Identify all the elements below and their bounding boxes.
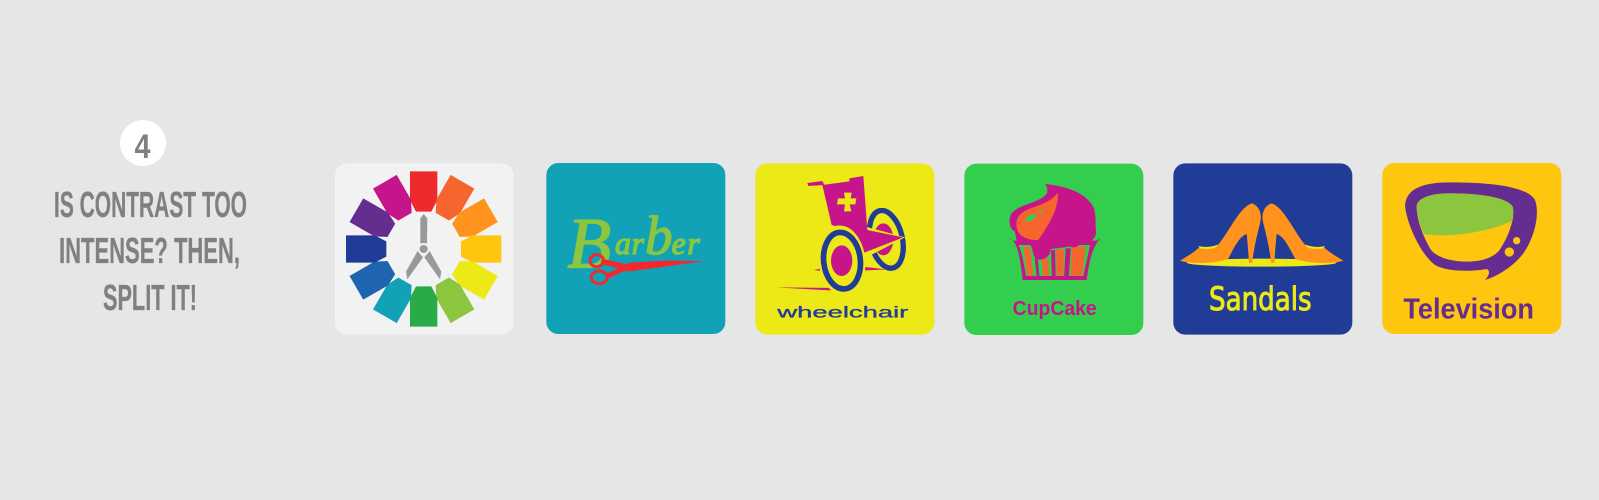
logo wordmark: r bbox=[687, 226, 700, 261]
panel: cupcake logo bbox=[964, 164, 1143, 335]
panel: split-complementary colour wheel bbox=[335, 163, 514, 335]
logo wordmark: wheelchair bbox=[776, 305, 909, 322]
logo wordmark: Sandals bbox=[1209, 280, 1312, 318]
panel: sandals logo bbox=[1173, 163, 1352, 335]
heading text: SPLIT IT! bbox=[103, 277, 197, 318]
step number badge bbox=[120, 120, 166, 166]
icon: television bbox=[1405, 182, 1537, 280]
step heading block bbox=[54, 120, 247, 318]
icon: scissors bbox=[590, 255, 704, 284]
icon: wheelchair bbox=[776, 176, 909, 298]
heading text: INTENSE? THEN, bbox=[59, 230, 240, 271]
panel: wheelchair logo bbox=[755, 163, 934, 335]
icon: cupcake bbox=[1008, 184, 1101, 280]
icon: high heels bbox=[1180, 203, 1343, 267]
logo wordmark: e bbox=[672, 226, 686, 261]
logo wordmark: CupCake bbox=[1013, 297, 1097, 320]
heading text: IS CONTRAST TOO bbox=[54, 184, 247, 225]
icon: colour wheel tags bbox=[346, 171, 501, 327]
step number badge: 4 bbox=[134, 128, 151, 166]
panel: television logo bbox=[1382, 163, 1561, 334]
logo wordmark: Television bbox=[1403, 293, 1534, 325]
logo wordmark: b bbox=[645, 205, 672, 266]
icon: split-complementary pointer bbox=[406, 214, 441, 279]
heading text bbox=[54, 184, 247, 318]
panel: barber logo bbox=[546, 163, 725, 334]
logo wordmark: a bbox=[615, 226, 631, 261]
logo wordmark: r bbox=[632, 226, 645, 261]
logo wordmark: B bbox=[567, 203, 611, 283]
